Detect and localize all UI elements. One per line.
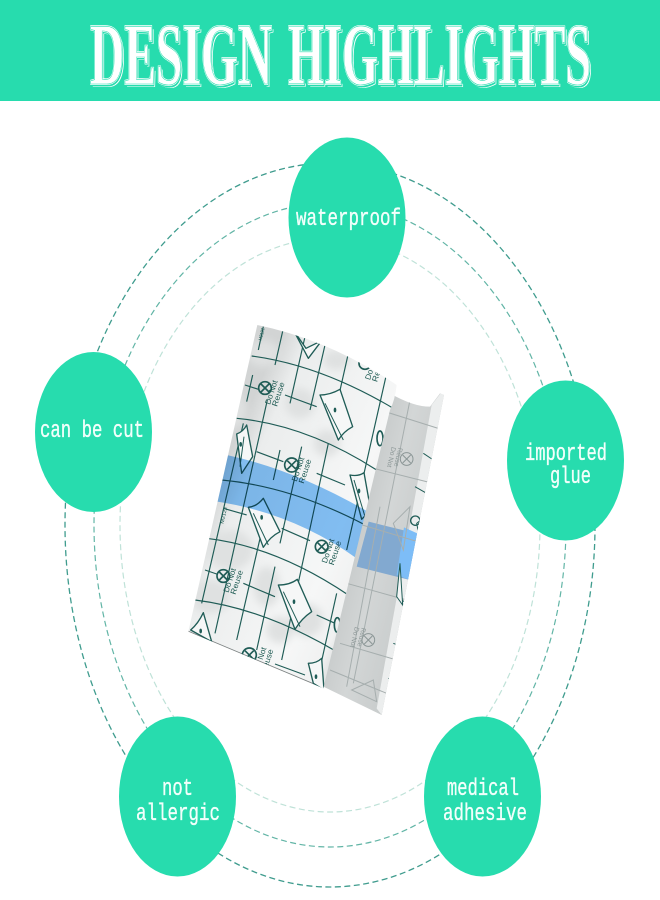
- front sheet: Do Not: [363, 354, 380, 381]
- title: DESIGN: [90, 7, 272, 104]
- front sheet: Do Not: [263, 378, 280, 406]
- back flap: [324, 394, 444, 715]
- front sheet: Reuse: [297, 457, 313, 485]
- header banner: [0, 0, 660, 101]
- back flap: Do Not: [385, 446, 397, 468]
- title: [90, 7, 593, 107]
- feature: can be cut: [35, 352, 152, 512]
- title: DESIGN: [92, 10, 274, 107]
- dashed rings: [65, 163, 595, 887]
- feature: medical adhesive: medical: [447, 776, 519, 803]
- product: transparent film roll: [180, 320, 453, 720]
- feature: not allergic: not: [162, 776, 193, 803]
- blue band: [217, 455, 371, 558]
- bandage icons: [191, 330, 371, 690]
- front sheet: [180, 320, 403, 693]
- front sheet: Do Not: [290, 455, 307, 483]
- feature: medical adhesive: adhesive: [443, 801, 527, 828]
- back flap: Reuse: [355, 627, 367, 647]
- front sheet: Reuse: [259, 647, 275, 675]
- feature: can be cut: can be cut: [40, 418, 144, 445]
- front sheet: Reuse: [370, 356, 387, 383]
- front sheet: Reuse: [270, 380, 287, 408]
- feature: waterproof: [288, 138, 406, 298]
- title: DESIGN: [90, 7, 272, 104]
- do not reuse marks: [217, 357, 383, 662]
- back flap: Reuse: [392, 447, 403, 467]
- feature: not allergic: [119, 716, 236, 876]
- row ticks beside the marks: [205, 385, 345, 675]
- front sheet: Do Not: [252, 645, 269, 673]
- back flap: Do Not: [348, 626, 360, 648]
- front sheet: Reuse: [229, 568, 245, 596]
- front sheet: Reuse: [327, 539, 343, 566]
- feature: not allergic: allergic: [136, 801, 220, 828]
- feature: imported glue: [507, 380, 624, 540]
- front sheet: Do Not: [320, 537, 337, 564]
- feature: waterproof: waterproof: [296, 206, 401, 233]
- feature: medical adhesive: [424, 716, 541, 876]
- feature: imported glue: glue: [550, 464, 591, 491]
- feature: imported glue: imported: [525, 441, 607, 468]
- front sheet: M2122: [258, 327, 266, 341]
- grid lines: [188, 327, 393, 688]
- front sheet: M2122: [219, 506, 228, 524]
- title: DESIGN: [91, 9, 273, 106]
- front sheet: Do Not: [222, 566, 238, 594]
